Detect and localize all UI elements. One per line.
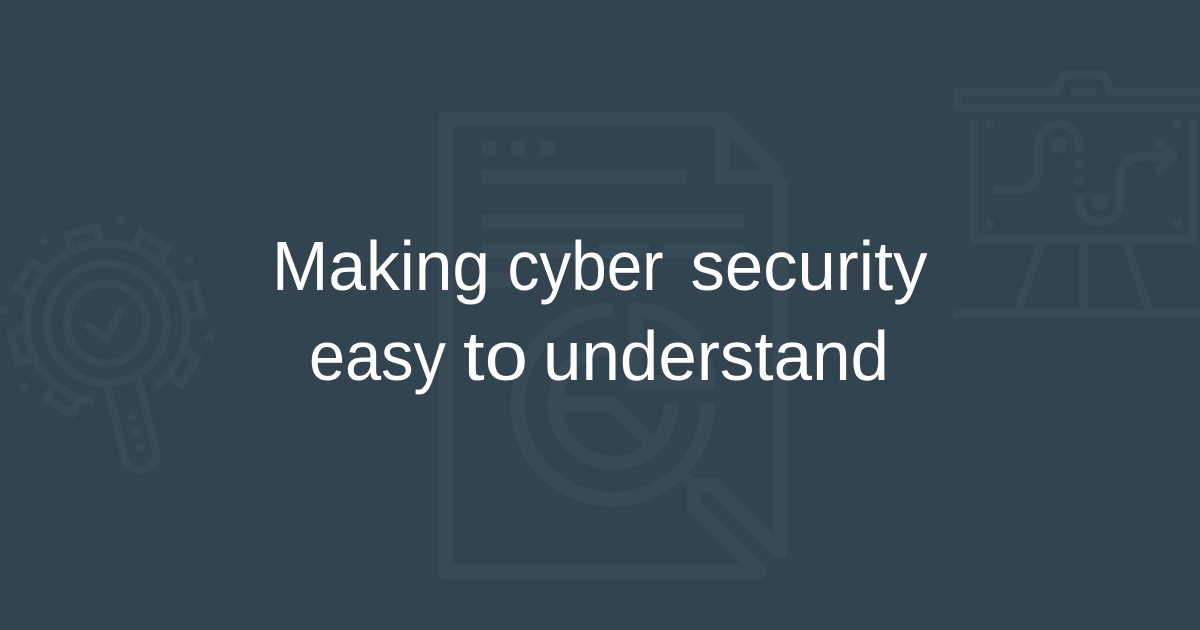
title: cyber — [508, 227, 664, 305]
icon: document with magnified pie chart — [446, 119, 780, 572]
title: Making — [272, 227, 490, 305]
title: understand — [543, 317, 889, 395]
title: to — [463, 317, 528, 395]
title: easy — [309, 317, 446, 395]
title — [272, 227, 928, 395]
icon: magnifier over gear with check mark — [0, 216, 214, 470]
icon: presentation easel with route arrow — [953, 75, 1200, 313]
title: security — [690, 227, 928, 305]
